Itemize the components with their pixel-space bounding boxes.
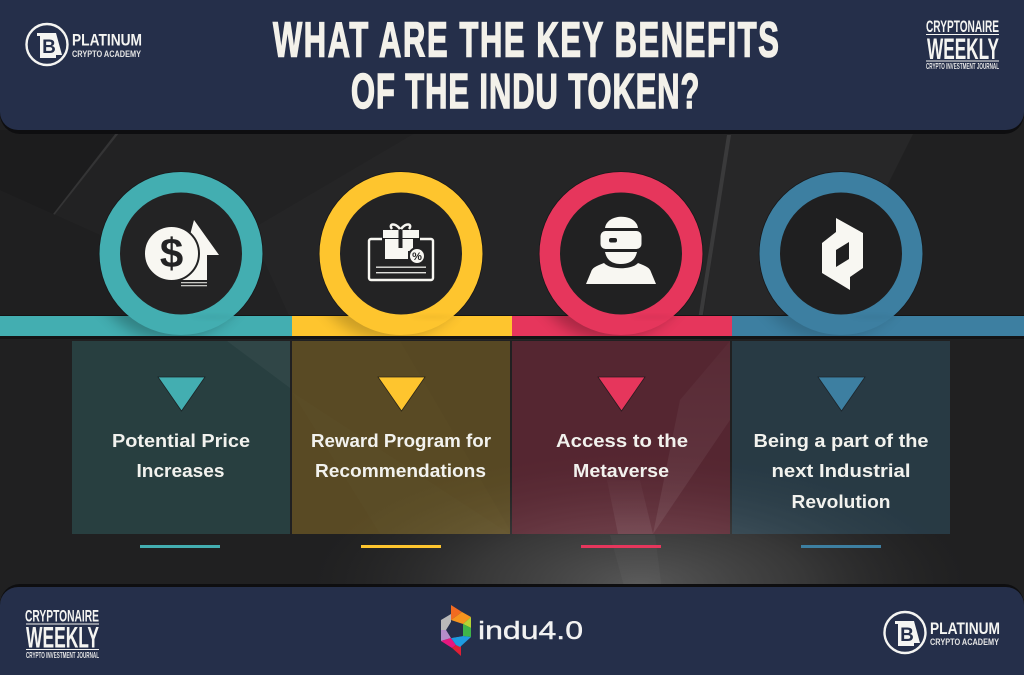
panel text line: Revolution [792, 491, 890, 512]
panel: industrial revolution [732, 341, 950, 534]
segment: red ring and ribbon [512, 171, 732, 340]
header logo: Platinum Crypto Academy: PLATINUM [72, 32, 142, 50]
footer logo: Platinum Crypto Academy: B [900, 625, 914, 646]
footer band [0, 584, 1024, 675]
pointer triangle [818, 377, 865, 411]
icon: indu token mark [822, 218, 863, 290]
header logo: Platinum Crypto Academy: B [42, 37, 56, 58]
panel: metaverse [512, 341, 730, 534]
icon: dollar and arrow: $ [160, 230, 183, 276]
panel text: Reward Program for [311, 430, 491, 451]
panel text line: Metaverse [573, 460, 669, 481]
panel text line: Increases [136, 460, 224, 481]
footer logo: Cryptonaire Weekly: CRYPTO INVESTMENT JOURNAL [26, 650, 99, 660]
panel: potential price increases [72, 341, 290, 534]
icon: dollar and arrow [144, 220, 219, 286]
underline accents [140, 545, 881, 548]
title: WHAT ARE THE KEY BENEFITS [273, 12, 779, 67]
title: OF THE INDU TOKEN? [351, 64, 699, 119]
header logo: Cryptonaire Weekly [926, 18, 999, 71]
icon: VR headset person [586, 217, 656, 284]
pointer triangle [598, 377, 645, 411]
footer logo: indu4.0: indu4.0 [478, 617, 583, 645]
panel text: Being a part of the [754, 430, 928, 451]
footer logo: Cryptonaire Weekly: WEEKLY [26, 622, 99, 654]
footer logo: Cryptonaire Weekly: CRYPTONAIRE [25, 608, 99, 626]
footer logo: indu4.0 [441, 605, 583, 656]
icon: gift card [369, 224, 433, 280]
segment: yellow ring and ribbon [292, 171, 512, 340]
header logo: Platinum Crypto Academy [26, 24, 142, 65]
pointer triangle [378, 377, 425, 411]
header band [0, 0, 1024, 134]
panel: reward program [292, 341, 510, 534]
timeline band shadow [0, 315, 1024, 339]
panel text line: Recommendations [315, 460, 486, 481]
segment: blue ring and ribbon [732, 171, 1024, 340]
title [273, 12, 779, 119]
panel text line: next Industrial [772, 460, 910, 481]
icon: gift card: % [412, 251, 422, 263]
panel text: Potential Price [112, 430, 250, 451]
footer logo: Platinum Crypto Academy: CRYPTO ACADEMY [930, 637, 1000, 648]
footer logo: Platinum Crypto Academy [884, 612, 1000, 653]
footer logo: Platinum Crypto Academy: PLATINUM [930, 620, 1000, 638]
pointer triangle [158, 377, 205, 411]
header logo: Platinum Crypto Academy: CRYPTO ACADEMY [72, 49, 142, 60]
footer logo: Cryptonaire Weekly [25, 608, 99, 660]
segment: teal ring and ribbon [0, 171, 292, 340]
panel text: Access to the [556, 430, 688, 451]
